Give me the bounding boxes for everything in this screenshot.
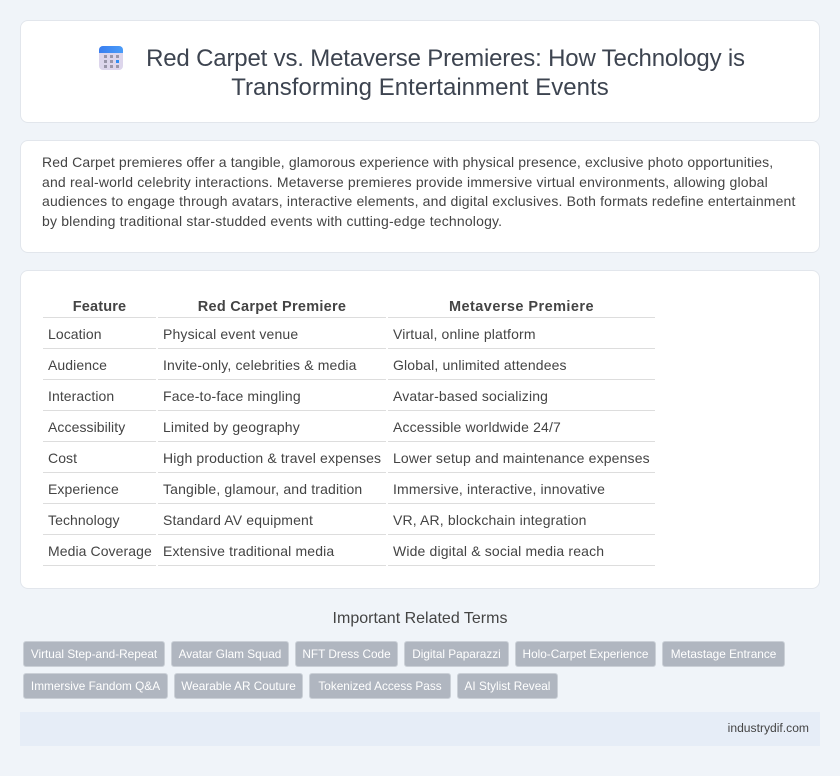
related term tags: Digital Paparazzi: [412, 647, 501, 661]
comparison table: Invite-only, celebrities & media: [163, 357, 357, 373]
related term tags: Holo-Carpet Experience: [523, 647, 648, 661]
related term tags: Avatar Glam Squad: [179, 647, 281, 661]
comparison table: Experience: [48, 481, 119, 497]
related term tags: Tokenized Access Pass: [318, 679, 442, 693]
related term tags: AI Stylist Reveal: [465, 679, 550, 693]
comparison table: Metaverse Premiere: [449, 299, 594, 315]
comparison table: Avatar-based socializing: [393, 388, 548, 404]
title: Transforming Entertainment Events: [231, 74, 609, 101]
related term tags: Metastage Entrance: [671, 647, 776, 661]
comparison table: High production & travel expenses: [163, 450, 381, 466]
comparison table: Face-to-face mingling: [163, 388, 301, 404]
related term tags: NFT Dress Code: [302, 647, 391, 661]
comparison table: Technology: [48, 512, 120, 528]
comparison table: Location: [48, 326, 102, 342]
comparison table: Feature: [73, 299, 126, 315]
description text: [42, 154, 796, 229]
comparison table: Red Carpet Premiere: [198, 299, 346, 315]
comparison table: Interaction: [48, 388, 114, 404]
related term tags: [23, 641, 785, 699]
related term tags: Wearable AR Couture: [181, 679, 296, 693]
comparison table: Media Coverage: [48, 543, 152, 559]
comparison table: Global, unlimited attendees: [393, 357, 567, 373]
related term tags: Virtual Step-and-Repeat: [31, 647, 157, 661]
description text: and real-world celebrity interactions. Metaverse premieres provide immersive virtual environments, allowing global: [42, 174, 768, 190]
comparison table: Tangible, glamour, and tradition: [163, 481, 362, 497]
table card: [20, 270, 820, 589]
description text: audiences to engage through avatars, interactive elements, and digital exclusives. Both formats redefine entertainment: [42, 193, 796, 209]
footer source: industrydif.com: [728, 721, 809, 735]
related terms heading: Important Related Terms: [333, 610, 507, 627]
comparison table: Standard AV equipment: [163, 512, 313, 528]
comparison table: Physical event venue: [163, 326, 298, 342]
title: [146, 45, 745, 101]
description text: by blending traditional star-studded events with cutting-edge technology.: [42, 213, 502, 229]
comparison table: Accessible worldwide 24/7: [393, 419, 561, 435]
icon: calendar: [99, 46, 123, 70]
description text: Red Carpet premieres offer a tangible, glamorous experience with physical presence, exclusive photo opportunities,: [42, 154, 773, 170]
comparison table: Limited by geography: [163, 419, 300, 435]
comparison table: Virtual, online platform: [393, 326, 536, 342]
comparison table: Immersive, interactive, innovative: [393, 481, 605, 497]
header card: [20, 20, 820, 123]
comparison table: VR, AR, blockchain integration: [393, 512, 587, 528]
comparison table: Extensive traditional media: [163, 543, 334, 559]
comparison table: Cost: [48, 450, 77, 466]
related term tags: Immersive Fandom Q&A: [31, 679, 160, 693]
comparison table: [43, 299, 655, 566]
title: Red Carpet vs. Metaverse Premieres: How Technology is: [146, 45, 745, 72]
footer bar: [20, 712, 820, 746]
description card: [20, 140, 820, 253]
comparison table: Lower setup and maintenance expenses: [393, 450, 650, 466]
comparison table: Wide digital & social media reach: [393, 543, 604, 559]
comparison table: Accessibility: [48, 419, 125, 435]
comparison table: Audience: [48, 357, 107, 373]
